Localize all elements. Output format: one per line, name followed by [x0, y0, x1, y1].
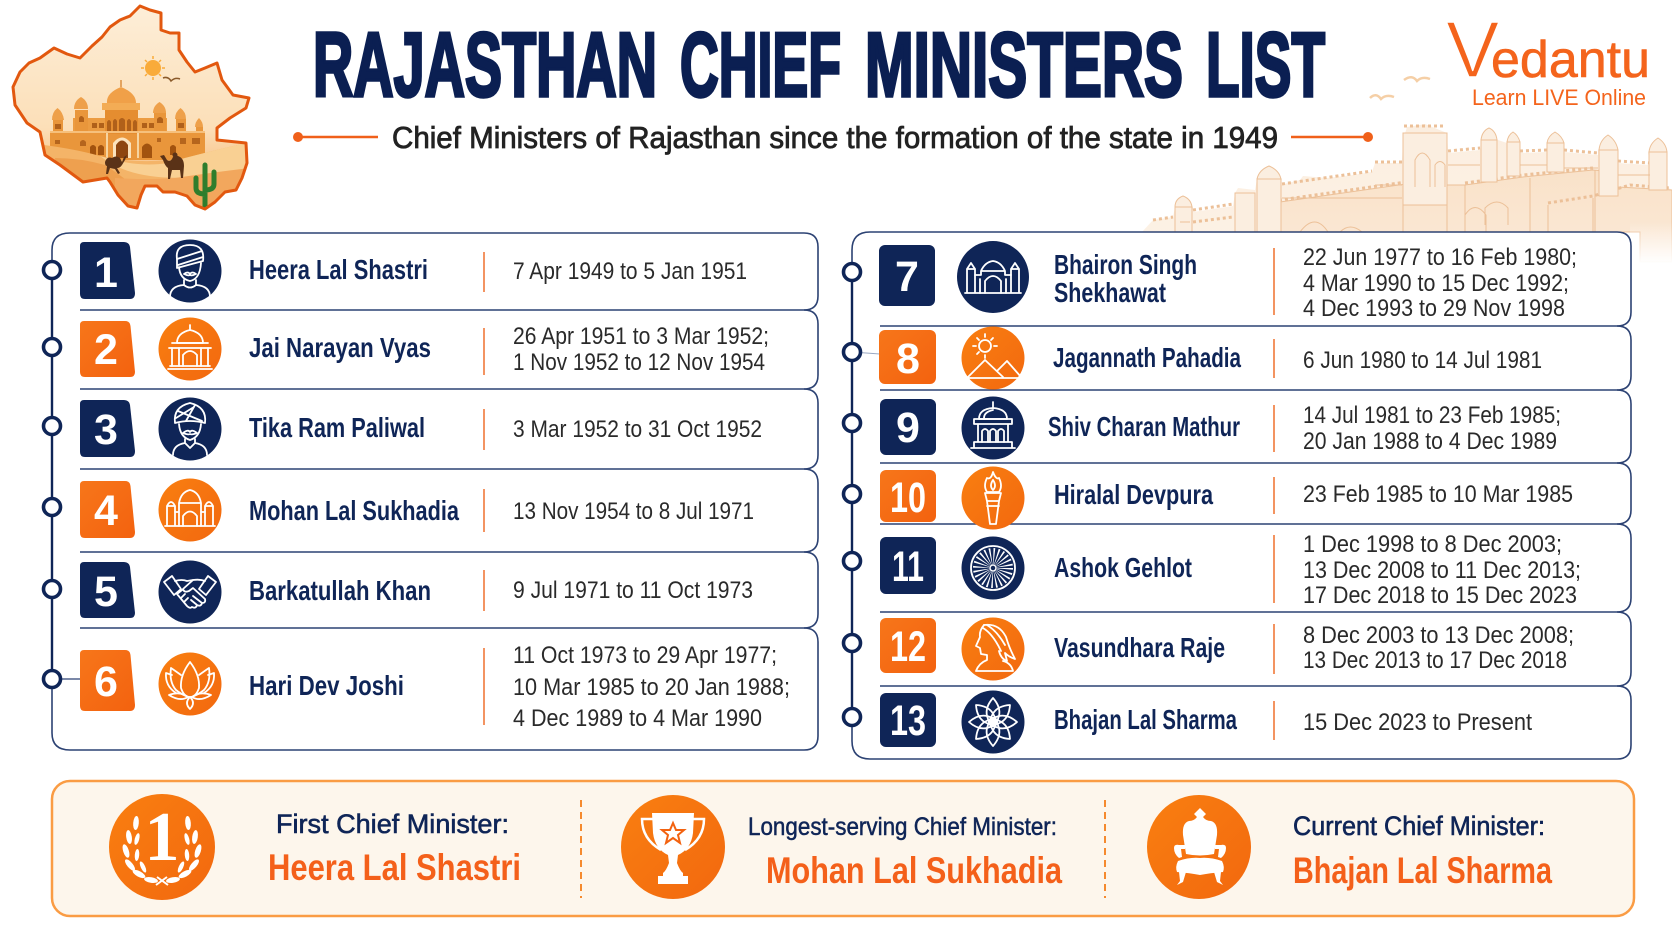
title: MINISTERS: [865, 15, 1183, 116]
row 13: Bhajan Lal Sharma: 13: [890, 697, 926, 745]
subtitle with lines: Chief Ministers of Rajasthan since the formation of the state in 1949: [392, 120, 1278, 155]
row 9: Shiv Charan Mathur: 14 Jul 1981 to 23 Feb 1985;: [1303, 402, 1561, 429]
highlight: first chief minister: [109, 794, 521, 900]
title: RAJASTHAN: [313, 15, 657, 116]
row 10: Hiralal Devpura: 10: [890, 474, 926, 522]
panel: left chief ministers list: [44, 233, 818, 750]
row 8: Jagannath Pahadia: [844, 326, 1631, 390]
row 3: Tika Ram Paliwal: 3: [94, 406, 118, 454]
row 2: Jai Narayan Vyas: 1 Nov 1952 to 12 Nov 1954: [513, 349, 765, 376]
palace: [50, 80, 205, 160]
row 9: Shiv Charan Mathur: 20 Jan 1988 to 4 Dec 1989: [1303, 428, 1557, 455]
row 6: Hari Dev Joshi: 10 Mar 1985 to 20 Jan 1988;: [513, 674, 790, 701]
row 5: Barkatullah Khan: [44, 552, 818, 628]
row 12: Vasundhara Raje: 12: [890, 623, 926, 671]
row 11: Ashok Gehlot: 1 Dec 1998 to 8 Dec 2003;: [1303, 531, 1562, 558]
logo: Vedantu: edantu: [1491, 31, 1650, 89]
row 2: Jai Narayan Vyas: 26 Apr 1951 to 3 Mar 1952;: [513, 323, 769, 350]
row 10: Hiralal Devpura: Hiralal Devpura: [1054, 479, 1213, 510]
row 5: Barkatullah Khan: 5: [94, 568, 118, 616]
cactus: [196, 165, 214, 208]
highlight: first chief minister: First Chief Minister:: [276, 809, 509, 839]
row 3: Tika Ram Paliwal: [44, 389, 818, 469]
panel: highlights: [52, 781, 1634, 916]
logo: Vedantu: V: [1446, 5, 1500, 94]
row 6: Hari Dev Joshi: [44, 642, 790, 732]
row 2: Jai Narayan Vyas: 2: [94, 326, 118, 374]
dunes: [44, 144, 242, 179]
row 13: Bhajan Lal Sharma: [844, 690, 1532, 754]
row 7: Bhairon Singh Shekhawat: Shekhawat: [1054, 277, 1166, 308]
row 1: Heera Lal Shastri: Heera Lal Shastri: [249, 254, 428, 285]
row 10: Hiralal Devpura: [844, 463, 1631, 530]
row 6: Hari Dev Joshi: 4 Dec 1989 to 4 Mar 1990: [513, 705, 762, 732]
highlight: first chief minister: 1: [144, 799, 180, 876]
row 11: Ashok Gehlot: Ashok Gehlot: [1054, 552, 1192, 583]
row 12: Vasundhara Raje: Vasundhara Raje: [1054, 632, 1225, 663]
illustration: Rajasthan map with palace: [10, 6, 250, 215]
row 6: Hari Dev Joshi: 6: [94, 658, 118, 706]
highlight: current chief minister: Current Chief Minister:: [1293, 811, 1545, 841]
row 12: Vasundhara Raje: 8 Dec 2003 to 13 Dec 2008;: [1303, 622, 1574, 649]
highlight: longest-serving chief minister: [621, 795, 1062, 899]
row 7: Bhairon Singh Shekhawat: 22 Jun 1977 to 16 Feb 1980;: [1303, 244, 1577, 271]
highlight: longest-serving chief minister: Longest-serving Chief Minister:: [748, 813, 1057, 841]
row 3: Tika Ram Paliwal: 3 Mar 1952 to 31 Oct 1952: [513, 416, 762, 443]
panel: right chief ministers list: [844, 232, 1631, 759]
row 11: Ashok Gehlot: [844, 524, 1631, 612]
towers: [1175, 196, 1192, 232]
highlight: longest-serving chief minister: Mohan Lal Sukhadia: [766, 850, 1062, 891]
decorative birds: [1370, 77, 1430, 99]
row 7: Bhairon Singh Shekhawat: 7: [895, 253, 919, 301]
row 12: Vasundhara Raje: [844, 612, 1631, 686]
row 10: Hiralal Devpura: 23 Feb 1985 to 10 Mar 1985: [1303, 481, 1573, 508]
row 3: Tika Ram Paliwal: Tika Ram Paliwal: [249, 412, 425, 443]
logo: Vedantu: Learn LIVE Online: [1472, 85, 1646, 110]
camels: [105, 152, 184, 179]
title: LIST: [1206, 15, 1325, 116]
row 9: Shiv Charan Mathur: [844, 390, 1631, 463]
title: CHIEF: [680, 15, 841, 116]
row 5: Barkatullah Khan: 9 Jul 1971 to 11 Oct 1973: [513, 577, 753, 604]
row 6: Hari Dev Joshi: Hari Dev Joshi: [249, 670, 404, 701]
highlight: current chief minister: Bhajan Lal Sharma: [1293, 850, 1552, 891]
row 2: Jai Narayan Vyas: Jai Narayan Vyas: [249, 332, 431, 363]
row 7: Bhairon Singh Shekhawat: [844, 241, 1617, 326]
row 4: Mohan Lal Sukhadia: [44, 469, 818, 552]
row 4: Mohan Lal Sukhadia: 4: [94, 487, 118, 535]
row 4: Mohan Lal Sukhadia: Mohan Lal Sukhadia: [249, 495, 459, 526]
row 7: Bhairon Singh Shekhawat: Bhairon Singh: [1054, 249, 1197, 280]
row 1: Heera Lal Shastri: 7 Apr 1949 to 5 Jan 1951: [513, 258, 747, 285]
highlight: current chief minister: [1147, 795, 1552, 899]
lower walls: [1270, 170, 1672, 262]
row 8: Jagannath Pahadia: Jagannath Pahadia: [1053, 342, 1241, 373]
row 11: Ashok Gehlot: 13 Dec 2008 to 11 Dec 2013;: [1303, 557, 1581, 584]
illustration: faded Amber fort skyline: [1142, 124, 1672, 264]
row 7: Bhairon Singh Shekhawat: 4 Mar 1990 to 15 Dec 1992;: [1303, 270, 1569, 297]
row 11: Ashok Gehlot: 11: [892, 543, 924, 591]
row 6: Hari Dev Joshi: 11 Oct 1973 to 29 Apr 1977;: [513, 642, 777, 669]
row 2: Jai Narayan Vyas: [44, 310, 818, 389]
row 1: Heera Lal Shastri: [44, 240, 804, 310]
row 11: Ashok Gehlot: 17 Dec 2018 to 15 Dec 2023: [1303, 582, 1577, 609]
row 12: Vasundhara Raje: 13 Dec 2013 to 17 Dec 2018: [1303, 647, 1567, 674]
row 4: Mohan Lal Sukhadia: 13 Nov 1954 to 8 Jul 1971: [513, 498, 754, 525]
row 8: Jagannath Pahadia: 6 Jun 1980 to 14 Jul 1981: [1303, 347, 1542, 374]
logo: Vedantu: [1446, 5, 1650, 110]
row 1: Heera Lal Shastri: 1: [94, 249, 118, 297]
row 5: Barkatullah Khan: Barkatullah Khan: [249, 575, 431, 606]
title: [313, 15, 1325, 116]
highlight: first chief minister: Heera Lal Shastri: [268, 847, 521, 888]
row 13: Bhajan Lal Sharma: Bhajan Lal Sharma: [1054, 704, 1237, 735]
row 9: Shiv Charan Mathur: 9: [896, 404, 920, 452]
row 7: Bhairon Singh Shekhawat: 4 Dec 1993 to 29 Nov 1998: [1303, 295, 1565, 322]
row 13: Bhajan Lal Sharma: 15 Dec 2023 to Present: [1303, 709, 1532, 736]
row 9: Shiv Charan Mathur: Shiv Charan Mathur: [1048, 411, 1240, 442]
row 8: Jagannath Pahadia: 8: [896, 335, 920, 383]
